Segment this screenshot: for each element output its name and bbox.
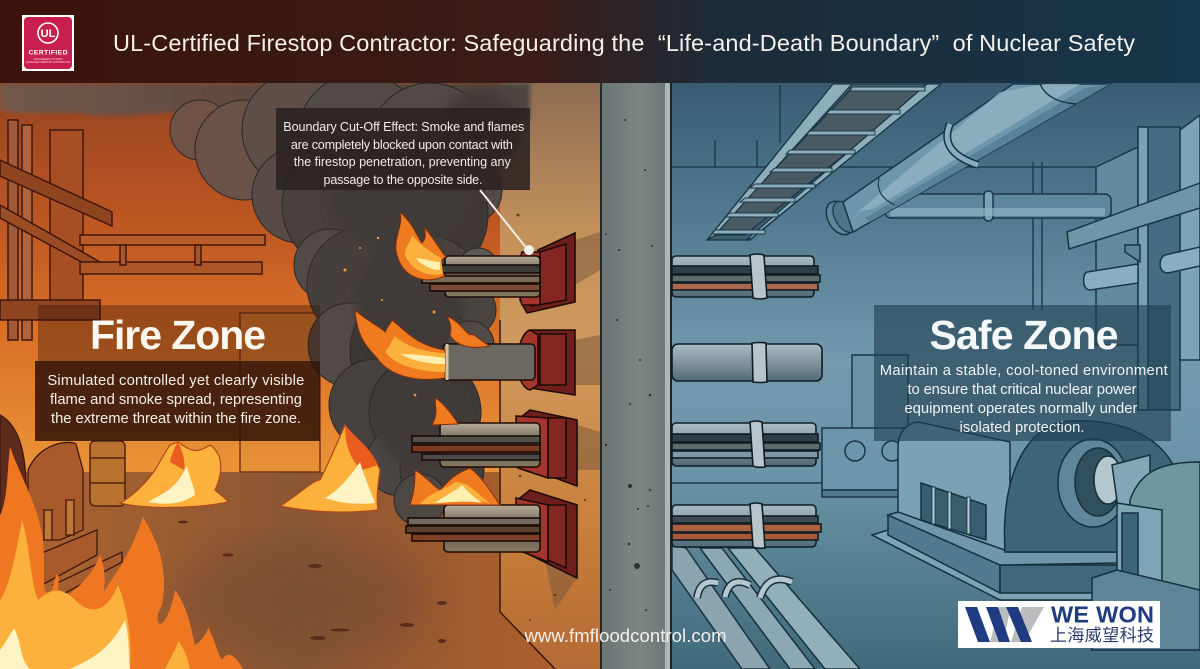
generator [872, 421, 1200, 650]
heading: safe zone: Safe Zone [930, 312, 1118, 358]
text: fire zone description: Simulated controlled yet clearly visible [47, 373, 304, 389]
conduit 2 [443, 344, 535, 380]
fire zone equipment [0, 415, 125, 597]
electrical box [822, 355, 910, 497]
logo: we won: 上海威望科技 [1050, 626, 1154, 645]
conduit right 2 [672, 342, 822, 382]
smoke cloud [0, 72, 530, 526]
text: safe zone description: isolated protection. [960, 420, 1084, 436]
icon: UL certified badge: CERTIFIED [28, 50, 68, 56]
panel: fire zone label [35, 305, 320, 441]
right wall and column [1096, 115, 1200, 410]
firestop plate 2 [518, 330, 575, 395]
panel: safe zone scene [672, 83, 1200, 669]
firestop plate 3 [516, 410, 577, 486]
text: safe zone description: Maintain a stable, cool-toned environment [880, 363, 1168, 379]
flames near pipes [355, 212, 500, 505]
header bar [0, 0, 1200, 83]
steel beam [1067, 183, 1200, 262]
callout: boundary cut-off effect: are completely blocked upon contact with [291, 138, 513, 152]
callout: boundary cut-off effect: passage to the opposite side. [324, 173, 482, 187]
pipe penetrations: left side [406, 233, 577, 578]
cable bundle 4 [406, 505, 540, 552]
panel: firewall side face [500, 83, 602, 669]
callout: boundary cut-off effect: the firestop penetration, preventing any [294, 155, 511, 169]
icon: UL certified badge: UL [41, 28, 56, 40]
floor specks [178, 520, 447, 643]
small fire 1 [120, 442, 228, 507]
callout: boundary cut-off effect: Boundary Cut-Off Effect: Smoke and flames [283, 120, 524, 134]
icon: UL certified badge: QUALIFIED FIRESTOP CONTRACTOR [26, 61, 70, 64]
title: UL-Certified Firestop Contractor: Safeguarding the “Life-and-Death Boundary” of Nuclear Safety [113, 30, 1135, 56]
panel: safe zone label [874, 305, 1172, 441]
cable bundle 1 [422, 256, 540, 297]
small wall pipes [1084, 247, 1200, 290]
icon: UL certified badge [22, 15, 74, 71]
back door frame [240, 313, 320, 472]
panel: fire zone scene [0, 83, 600, 669]
pipe penetrations: right side [672, 254, 822, 548]
logo: we won: WE WON [1051, 602, 1154, 628]
firestop plate 1 [518, 233, 575, 313]
icon: UL certified badge: MANAGEMENT SYSTEM [34, 58, 62, 61]
text: safe zone description: equipment operates normally under [904, 401, 1138, 417]
bottom floor pipes [672, 545, 860, 669]
cable bundle right 1 [672, 254, 820, 299]
website url: www.fmfloodcontrol.com [524, 625, 726, 646]
cable bundle 3 [412, 423, 540, 467]
horizontal pipe [885, 191, 1111, 221]
text: fire zone description: the extreme threat within the fire zone. [51, 411, 301, 427]
text: fire zone description: flame and smoke spread, representing [50, 392, 302, 408]
fire zone steel framing [0, 120, 265, 340]
heading: fire zone: Fire Zone [90, 312, 266, 358]
text: safe zone description: to ensure that critical nuclear power [908, 382, 1137, 398]
cable ladder tray [707, 84, 941, 240]
big diagonal pipe [821, 84, 1110, 240]
large foreground fire [0, 447, 243, 669]
callout: boundary cut-off effect [276, 108, 534, 255]
logo: we won [958, 601, 1160, 648]
panel: concrete barrier [602, 83, 672, 669]
cable bundle right 4 [672, 503, 821, 548]
firestop plate 4 [516, 490, 577, 578]
cable bundle right 3 [672, 421, 820, 467]
small fire 2 [280, 425, 380, 512]
vertical conduits [715, 85, 1042, 310]
